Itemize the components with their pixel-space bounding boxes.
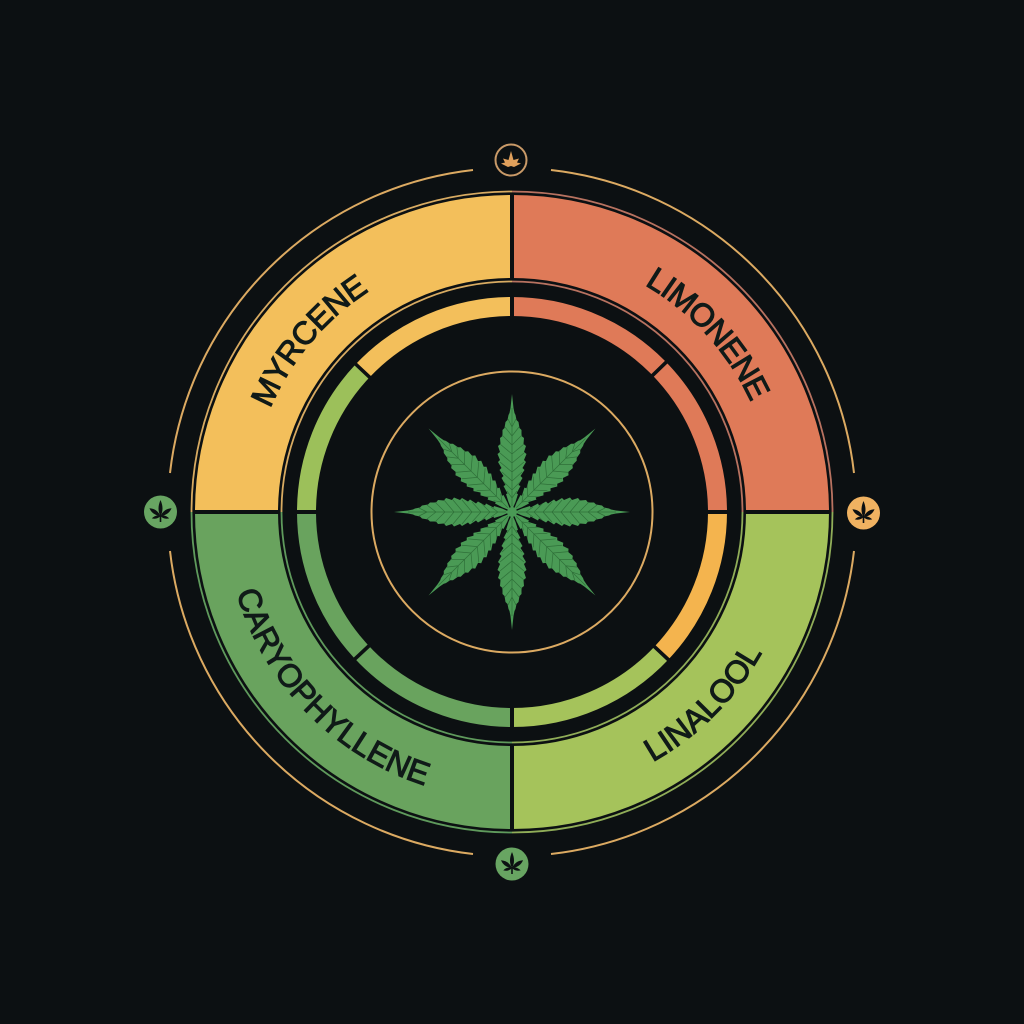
inner circle xyxy=(372,372,652,652)
segment: Linalool xyxy=(512,512,834,834)
quadrant dividers and ticks xyxy=(194,194,830,830)
central cannabis leaf xyxy=(394,394,630,630)
label: Caryophyllene: CARYOPHYLLENE xyxy=(238,589,431,786)
icon: top badge xyxy=(496,144,526,176)
label: Limonene: LIMONENE xyxy=(646,266,771,402)
icon: left badge xyxy=(144,496,177,528)
inner ring segments xyxy=(306,306,718,718)
segment: Limonene xyxy=(512,190,834,512)
outer thin ring arcs xyxy=(170,170,854,854)
icon: right badge xyxy=(847,496,880,530)
segment: Caryophyllene xyxy=(190,512,512,834)
segment: Myrcene xyxy=(190,190,512,512)
icon: bottom badge xyxy=(496,848,528,880)
label: Myrcene: MYRCENE xyxy=(250,273,369,407)
label: Linalool: LINALOOL xyxy=(642,651,762,762)
